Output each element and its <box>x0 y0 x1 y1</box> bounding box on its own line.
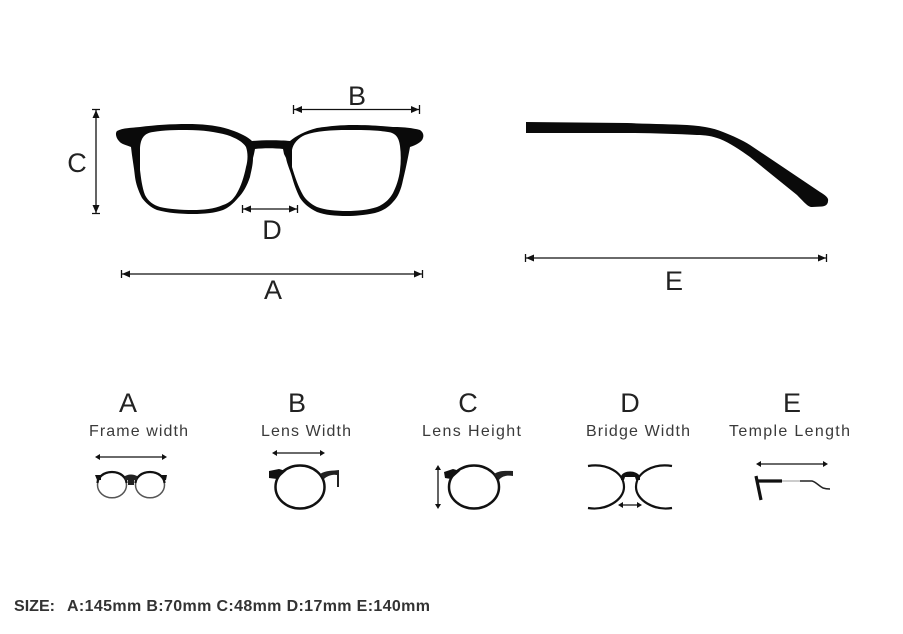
glasses front silhouette <box>116 124 423 216</box>
legend column: D bridge width <box>586 388 690 508</box>
letter: A: A <box>264 275 282 305</box>
panel: side view of temple <box>526 122 828 296</box>
dimension arrow: D <box>242 205 298 213</box>
arrow: frame width <box>95 454 167 460</box>
letter: B: B <box>288 388 306 418</box>
size specification line <box>14 598 430 615</box>
label: Lens Width: Lens Width <box>261 423 351 440</box>
label: Bridge Width: Bridge Width <box>586 423 690 440</box>
measurements: A:145mm B:70mm C:48mm D:17mm E:140mm <box>67 598 430 615</box>
legend column: A frame width <box>89 388 188 498</box>
arrow: temple length <box>756 461 828 467</box>
legend column: C lens height <box>422 388 522 509</box>
icon: side view with temple <box>756 476 830 500</box>
icon: single lens with bridge <box>444 466 513 508</box>
dimension arrow: A <box>122 270 422 278</box>
panel: front view of glasses <box>67 81 423 305</box>
arrow: bridge width <box>618 502 642 508</box>
icon: single lens with bridge <box>269 466 339 508</box>
letter: C: C <box>458 388 478 418</box>
arrow: lens height <box>435 465 441 509</box>
dimension arrow: C <box>92 110 100 214</box>
letter: E: E <box>783 388 801 418</box>
icon: round glasses front <box>95 472 167 498</box>
label: Lens Height: Lens Height <box>422 423 522 440</box>
label: Temple Length: Temple Length <box>729 423 850 440</box>
letter: D: D <box>262 215 282 245</box>
legend column: B lens width <box>261 388 351 508</box>
temple arm silhouette <box>526 122 828 207</box>
letter: B: B <box>348 81 366 111</box>
legend column: E temple length <box>729 388 850 500</box>
letter: A: A <box>119 388 137 418</box>
arrow: lens width <box>272 450 325 456</box>
label: SIZE: SIZE: <box>14 598 55 615</box>
letter: D: D <box>620 388 640 418</box>
letter: C: C <box>67 148 87 178</box>
dimension arrow: E <box>526 254 826 262</box>
dimension arrow: B <box>294 105 420 114</box>
label: Frame width: Frame width <box>89 423 188 440</box>
icon: glasses bridge <box>588 465 672 508</box>
letter: E: E <box>665 266 683 296</box>
